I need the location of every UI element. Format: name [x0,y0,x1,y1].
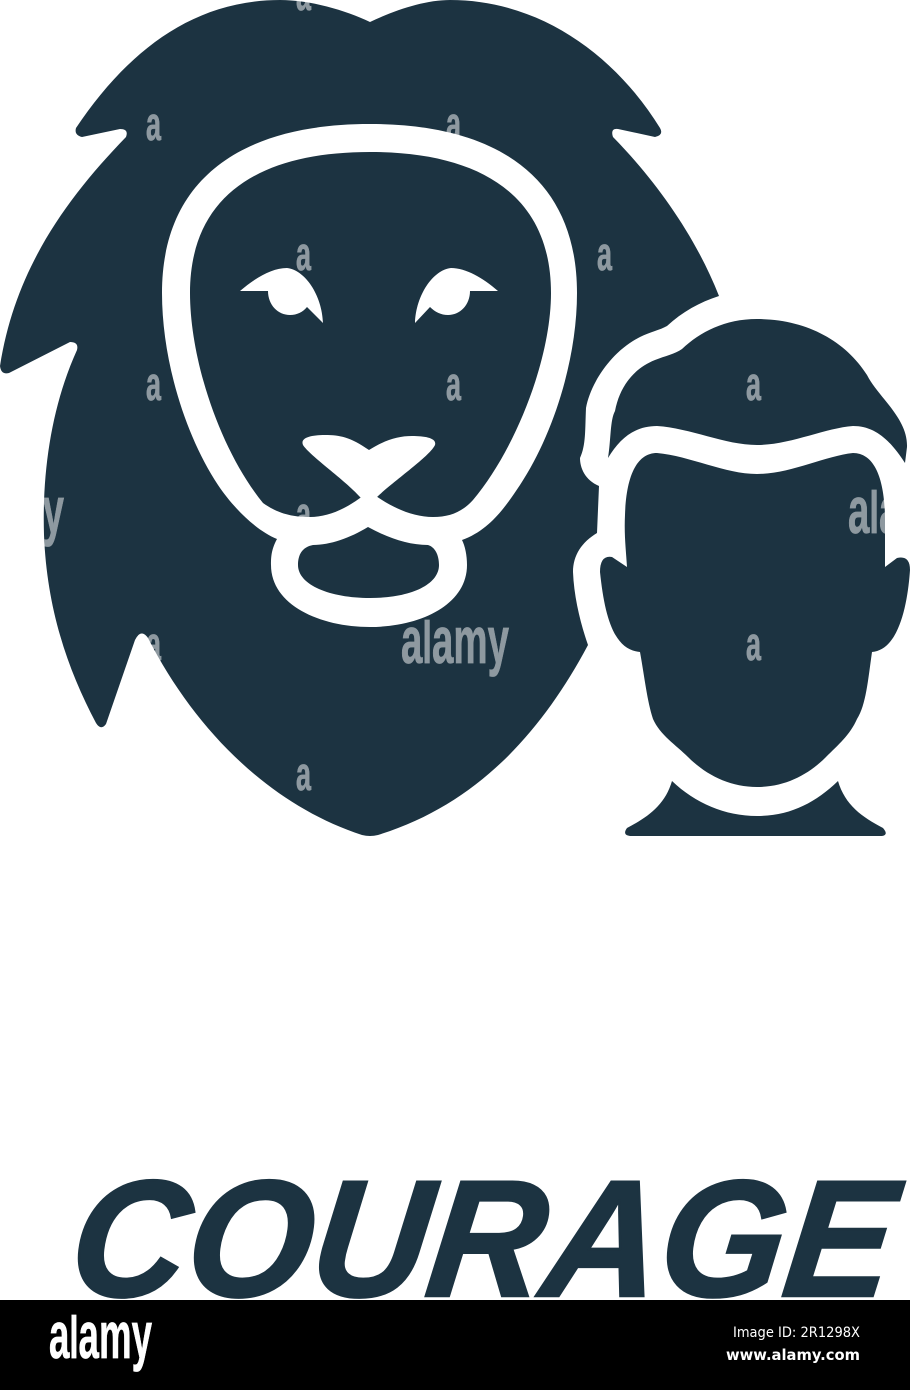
watermark letters: a [296,227,311,280]
watermark letters: a [446,97,461,150]
icon: man head [600,319,910,836]
lion left eye [240,268,323,323]
watermark letters: a [746,357,761,410]
watermark letters: a [146,97,161,150]
watermark letters [0,0,910,800]
icon: lion head [0,0,719,836]
watermark letters: a [446,357,461,410]
watermark letters: a [597,227,612,280]
lion mane [0,0,719,836]
lion right eye [415,268,498,323]
watermark letters: alamy [401,603,509,677]
website: www.alamy.com [726,1346,860,1364]
title: COURAGE [62,1147,910,1332]
footer bar [0,1298,910,1390]
watermark letters: a [746,617,761,670]
watermark letters: a [146,617,161,670]
watermark letters: a [146,357,161,410]
lion face ring [162,124,577,627]
lion nose [302,435,435,505]
lion upper face [190,152,551,517]
lion chin [298,527,439,598]
watermark letters: a [296,747,311,800]
man face and ears [600,453,910,787]
watermark letters: a [296,487,311,540]
footer logo: alamy [49,1298,152,1372]
man shoulders [625,781,886,836]
man hair [608,319,907,463]
image id: Image ID: 2R1298X [733,1325,860,1341]
